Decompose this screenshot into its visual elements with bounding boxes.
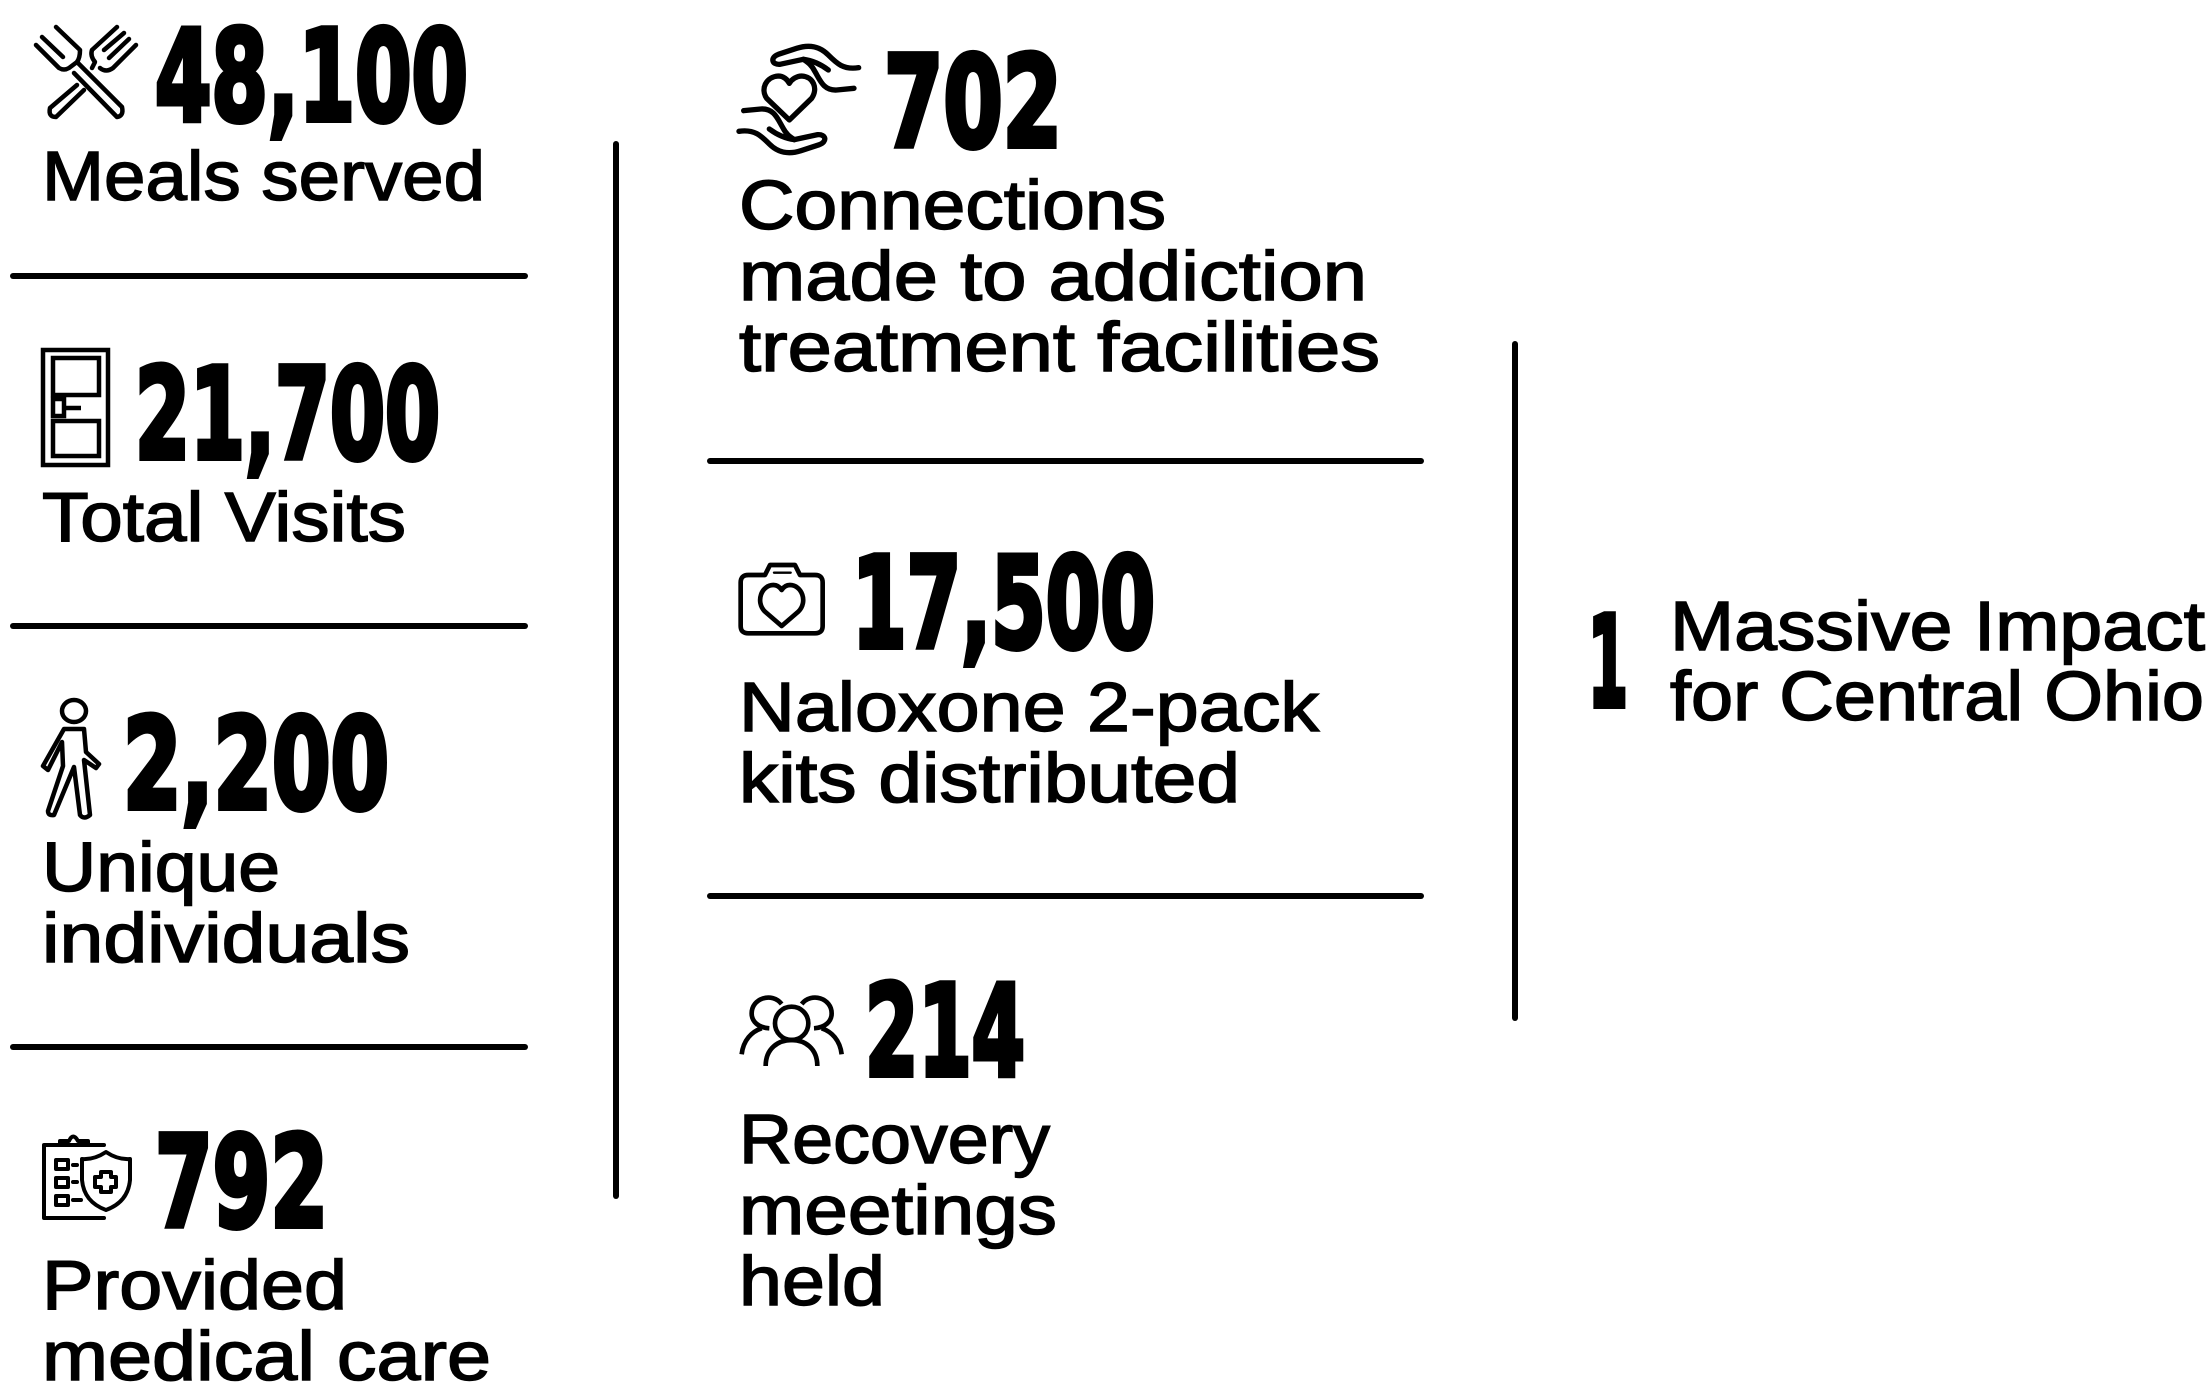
icon: clipboard with medical shield [44,1136,130,1218]
label: Unique individuals: individuals [42,899,410,977]
number: 21,700: 21,700 [135,341,440,488]
number: 702: 702 [884,29,1062,176]
stat: recovery meetings [739,958,1057,1320]
panel: massive impact statement: 1 [1588,589,1628,736]
stat: meals served [36,3,485,215]
icon: walking person [43,700,99,818]
label: Unique individuals: Unique [42,828,280,906]
label: Naloxone 2-pack kits distributed: Naloxone 2-pack [739,668,1320,746]
stat: connections to treatment [739,29,1380,386]
label: Naloxone 2-pack kits distributed: kits distributed [739,739,1240,817]
icon: door [43,350,108,465]
panel: middle column of statistics [707,29,1424,1320]
label: Recovery meetings held: held [739,1242,885,1320]
icon: kit with heart [741,565,823,633]
label: Connections made to addiction treatment facilities: treatment facilities [739,308,1380,386]
stat: naloxone kits [739,530,1320,817]
label: Total Visits: Total Visits [42,478,406,556]
number: 2,200: 2,200 [123,691,389,838]
label: Connections made to addiction treatment facilities: Connections [739,166,1166,244]
icon: hands holding heart [739,46,859,153]
icon: crossed fork and knife [36,27,136,117]
icon: group of people [742,998,842,1066]
label: Recovery meetings held: meetings [739,1171,1057,1249]
stat: provided medical care [42,1109,491,1383]
stat: unique individuals [42,691,410,977]
label: Meals served: Meals served [42,137,485,215]
label: Recovery meetings held: Recovery [739,1100,1050,1178]
label: Connections made to addiction treatment facilities: made to addiction [739,237,1367,315]
panel: left column of statistics [10,3,528,1383]
label: Provided medical care: Provided [42,1246,347,1324]
label: Massive Impact for Central Ohio: Massive Impact [1670,587,2205,665]
number: 792: 792 [155,1109,328,1256]
number: 17,500: 17,500 [852,530,1155,677]
number: 214: 214 [865,958,1025,1105]
panel: massive impact statement [1588,587,2205,736]
number: 48,100: 48,100 [155,3,468,150]
label: Massive Impact for Central Ohio: for Central Ohio [1670,657,2204,735]
stat: total visits [42,341,440,556]
